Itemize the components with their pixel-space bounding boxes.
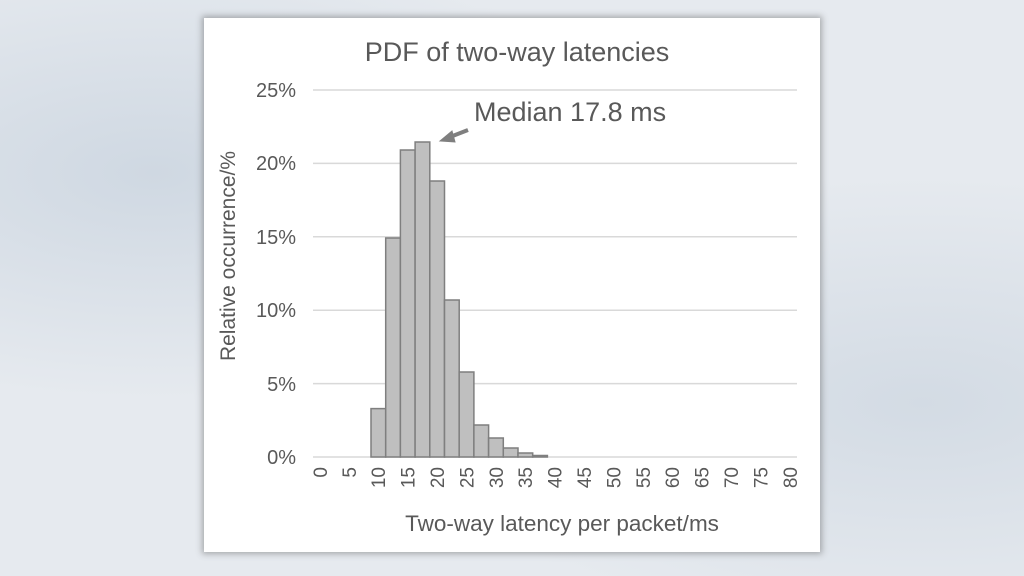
- x axis labels: [311, 467, 802, 488]
- x axis labels: 65: [692, 467, 714, 488]
- x axis labels: 80: [781, 467, 802, 488]
- y axis labels: 20%: [256, 153, 296, 175]
- x axis labels: 55: [634, 467, 655, 488]
- x axis labels: 15: [398, 467, 420, 488]
- x axis labels: 45: [575, 467, 596, 488]
- x axis labels: 70: [722, 467, 743, 488]
- x axis labels: 75: [752, 467, 772, 488]
- title: PDF of two-way latencies: [365, 37, 669, 67]
- x axis labels: 40: [546, 467, 566, 488]
- y axis title: Relative occurrence/%: [217, 151, 240, 361]
- x axis labels: 35: [516, 467, 537, 488]
- x axis labels: 0: [311, 467, 332, 478]
- x axis title: Two-way latency per packet/ms: [405, 511, 719, 536]
- x axis labels: 10: [369, 467, 390, 488]
- x axis labels: 60: [663, 467, 684, 488]
- x axis labels: 50: [604, 467, 626, 488]
- y axis labels: 10%: [256, 300, 296, 322]
- callout: median: Median 17.8 ms: [474, 97, 666, 127]
- y axis labels: 15%: [256, 227, 296, 249]
- y axis labels: 25%: [256, 80, 296, 102]
- histogram bars: [371, 142, 547, 457]
- y axis labels: [256, 80, 296, 469]
- y axis labels: 0%: [267, 447, 296, 469]
- x axis labels: 20: [428, 467, 449, 488]
- x axis labels: 5: [340, 467, 361, 478]
- y axis labels: 5%: [267, 374, 296, 396]
- x axis labels: 30: [487, 467, 508, 488]
- x axis labels: 25: [458, 467, 478, 488]
- panel: chart card: [204, 18, 820, 552]
- arrow: median pointer: [440, 130, 468, 142]
